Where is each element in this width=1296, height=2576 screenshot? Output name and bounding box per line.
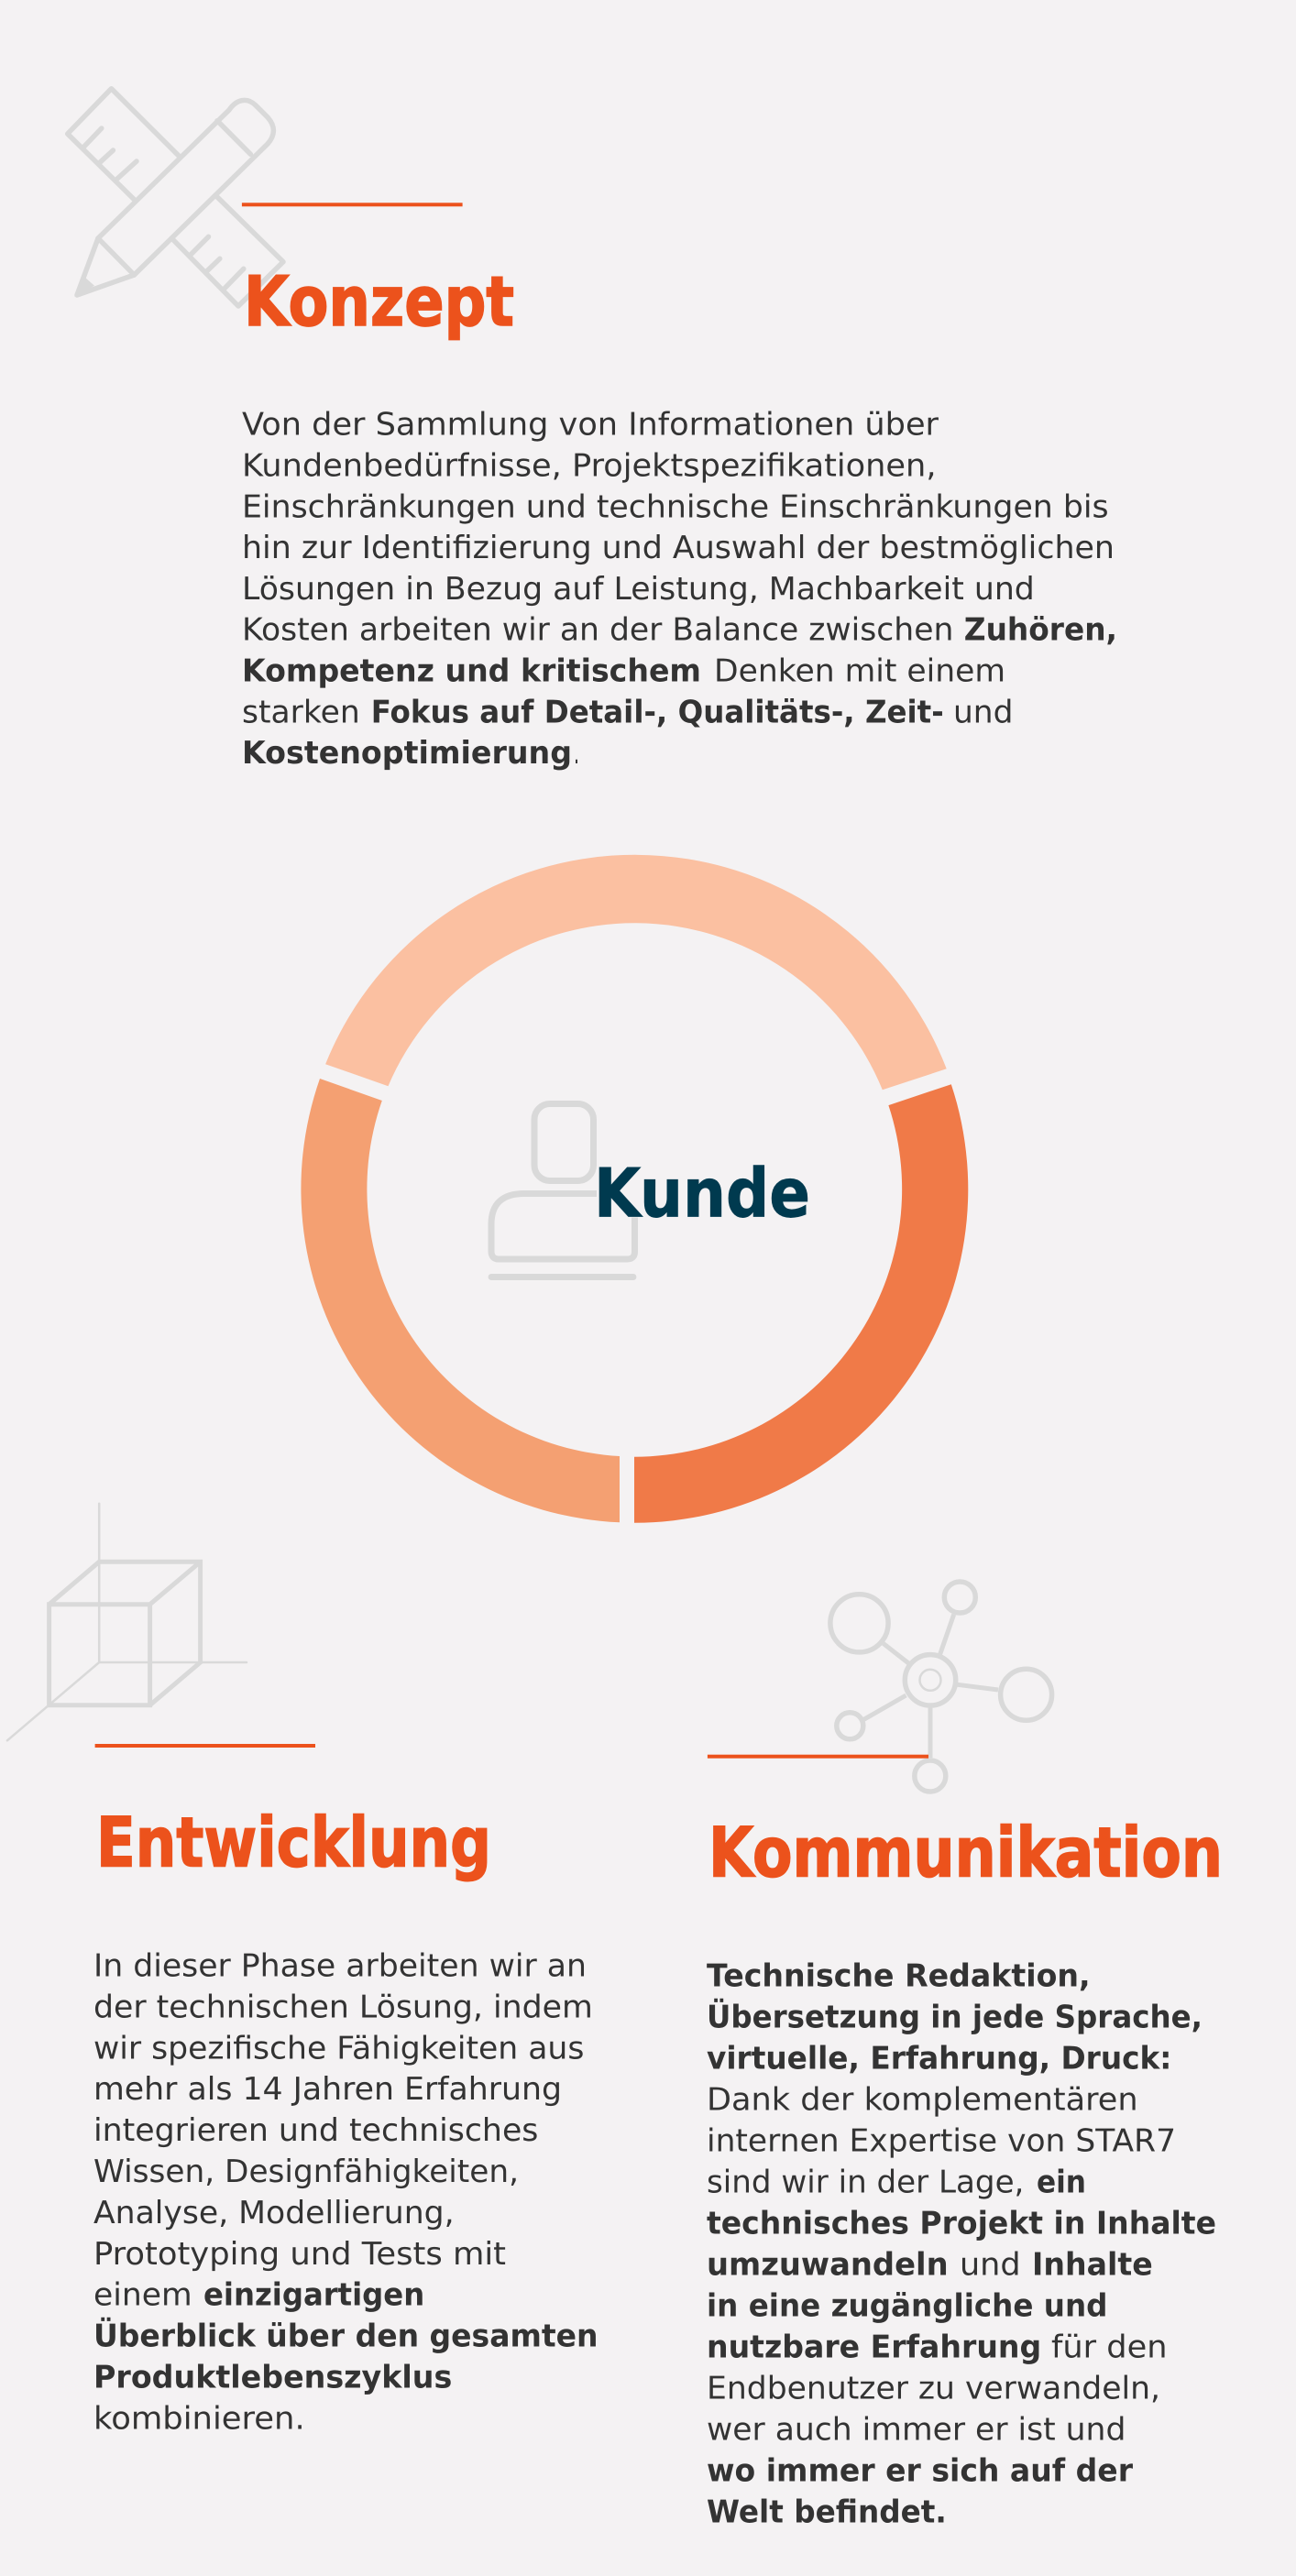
icon: ruler and pencil bbox=[68, 89, 283, 306]
text block: Kommunikation description: umzuwandeln bbox=[707, 2247, 949, 2284]
panel: Kunde ring diagram bbox=[301, 855, 968, 1523]
text block: Kommunikation description: Dank der komplementären bbox=[707, 2082, 1138, 2119]
text block: Entwicklung description: In dieser Phase arbeiten wir an bbox=[93, 1948, 587, 1985]
text block: Konzept description: Kompetenz und kritischem bbox=[242, 652, 701, 689]
text block: Kommunikation description: und bbox=[960, 2247, 1021, 2284]
text block: Entwicklung description: Wissen, Designfähigkeiten, bbox=[93, 2154, 519, 2190]
text block: Entwicklung description: wir spezifische Fähigkeiten aus bbox=[93, 2030, 584, 2066]
label: Kunde: Kunde bbox=[594, 1156, 810, 1233]
text block: Kommunikation description: in eine zugängliche und bbox=[707, 2288, 1107, 2325]
text block: Konzept description: Von der Sammlung von Informationen über bbox=[242, 407, 939, 444]
text block: Konzept description: Einschränkungen und technische Einschränkungen bis bbox=[242, 488, 1109, 525]
text block: Entwicklung description: der technischen Lösung, indem bbox=[93, 1989, 593, 2025]
icon: network nodes bbox=[830, 1582, 1052, 1792]
label backing bbox=[597, 1162, 813, 1217]
text block: Kommunikation description: sind wir in der Lage, bbox=[707, 2165, 1024, 2201]
text block: Konzept description: Denken mit einem bbox=[714, 652, 1005, 689]
text block: Kommunikation description: wo immer er sich auf der bbox=[707, 2453, 1133, 2490]
heading: Entwicklung: Entwicklung bbox=[96, 1803, 491, 1883]
text block: Entwicklung description: mehr als 14 Jahren Erfahrung bbox=[93, 2071, 562, 2108]
icon: person bbox=[489, 1103, 636, 1280]
divider line: Konzept bbox=[242, 203, 463, 206]
text block: Konzept description: Zuhören, bbox=[964, 612, 1117, 649]
text block: Kommunikation description: Welt befindet. bbox=[707, 2494, 947, 2531]
text block: Entwicklung description bbox=[93, 1948, 598, 2437]
text block: Kommunikation description: Übersetzung in jede Sprache, bbox=[707, 1999, 1203, 2036]
text block: Konzept description: Kundenbedürfnisse, Projektspezifikationen, bbox=[242, 447, 937, 484]
text block: Entwicklung description: Analyse, Modellierung, bbox=[93, 2195, 455, 2231]
text block: Entwicklung description: einzigartigen bbox=[203, 2277, 424, 2314]
ring segment: top bbox=[325, 855, 947, 1090]
divider line: Kommunikation bbox=[708, 1755, 928, 1759]
text block: Konzept description bbox=[242, 407, 1117, 772]
text block: Konzept description: hin zur Identifizierung und Auswahl der bestmöglichen bbox=[242, 530, 1115, 566]
text block: Kommunikation description: Technische Redaktion, bbox=[707, 1958, 1091, 1995]
text block: Kommunikation description bbox=[707, 1958, 1216, 2531]
text block: Kommunikation description: Inhalte bbox=[1032, 2247, 1153, 2284]
heading: Konzept: Konzept bbox=[244, 261, 514, 342]
text block: Kommunikation description: wer auch immer er ist und bbox=[707, 2412, 1126, 2449]
text block: Konzept description: Kosten arbeiten wir an der Balance zwischen bbox=[242, 612, 953, 649]
panel: Kommunikation bbox=[707, 1582, 1223, 2531]
panel: Konzept bbox=[68, 89, 1117, 772]
text block: Konzept description: und bbox=[953, 694, 1013, 730]
text block: Konzept description: Fokus auf Detail-, Qualitäts-, Zeit- bbox=[371, 694, 944, 730]
text block: Kommunikation description: technisches Projekt in Inhalte bbox=[707, 2206, 1216, 2242]
text block: Konzept description: Lösungen in Bezug auf Leistung, Machbarkeit und bbox=[242, 571, 1035, 608]
text block: Konzept description: starken bbox=[242, 694, 360, 730]
icon: cube on axes bbox=[7, 1504, 247, 1740]
text block: Konzept description: . bbox=[574, 735, 579, 772]
text block: Konzept description: Kostenoptimierung bbox=[242, 735, 572, 772]
text block: Entwicklung description: einem bbox=[93, 2277, 192, 2314]
text block: Kommunikation description: virtuelle, Erfahrung, Druck: bbox=[707, 2041, 1171, 2077]
ring segment: right bbox=[634, 1084, 968, 1523]
text block: Entwicklung description: Produktlebenszyklus bbox=[93, 2359, 452, 2395]
text block: Entwicklung description: kombinieren. bbox=[93, 2400, 305, 2437]
divider line: Entwicklung bbox=[95, 1744, 315, 1748]
panel: Entwicklung bbox=[7, 1504, 598, 2437]
text block: Kommunikation description: für den bbox=[1051, 2329, 1168, 2366]
ring segment: left bbox=[301, 1079, 620, 1522]
text block: Kommunikation description: ein bbox=[1037, 2165, 1086, 2201]
text block: Entwicklung description: Prototyping und Tests mit bbox=[93, 2236, 506, 2273]
text block: Kommunikation description: internen Expertise von STAR7 bbox=[707, 2123, 1176, 2160]
text block: Entwicklung description: integrieren und technisches bbox=[93, 2112, 538, 2149]
text block: Entwicklung description: Überblick über den gesamten bbox=[93, 2318, 598, 2355]
text block: Kommunikation description: Endbenutzer zu verwandeln, bbox=[707, 2371, 1160, 2407]
text block: Kommunikation description: nutzbare Erfahrung bbox=[707, 2329, 1041, 2366]
